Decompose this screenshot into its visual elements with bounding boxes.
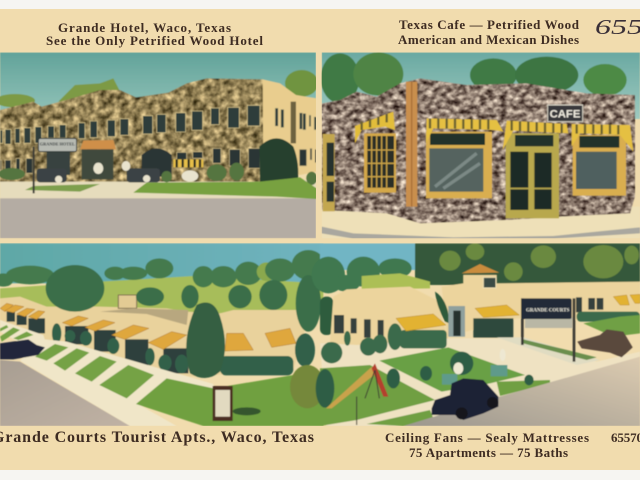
lawn [133,177,317,199]
garage door [142,148,172,177]
heading: Texas Cafe: Texas Cafe — Petrified Wood [399,17,580,32]
court buildings [0,297,305,377]
stone cafe building [322,78,635,223]
right window [573,135,626,196]
right half of courts [312,243,640,426]
caption: amenities [385,430,589,460]
small lawn [25,184,100,192]
centre lawn [379,347,525,392]
benches [442,365,507,385]
lobby front [47,152,70,175]
entrance canopy [80,140,116,149]
front lawn strip [367,410,433,426]
trees among buildings [46,265,321,332]
orange awnings [0,303,296,351]
tree line [0,250,325,287]
ivy [435,292,449,323]
sky [320,243,423,270]
main lawn [136,375,323,426]
field [0,276,323,313]
caption: amenities: 75 Apartments — 75 Baths [409,445,568,460]
hotel sign and post: GRANDE HOTEL [40,141,75,146]
road [403,357,640,426]
Grande Courts sign and posts: GRANDE COURTS [526,308,570,313]
left lawn [320,365,435,426]
windows [334,297,603,338]
entrance [82,149,113,179]
stone hotel building [0,78,269,182]
parked cars [37,168,160,182]
pavement grey strip [322,227,640,239]
panel: Grande Courts illustration [0,243,640,426]
striped awnings [355,112,633,152]
roadway and forecourt [320,338,640,426]
sky [322,52,640,119]
terrace lawns [0,325,154,398]
pavement [322,207,640,238]
cream wing [263,79,317,175]
side door [323,134,335,211]
upper right lawn [583,315,640,337]
left tree edge [320,297,333,335]
sky [0,52,316,110]
hedges [321,312,640,363]
CAFE sign: CAFE [550,109,581,121]
main window [426,132,492,198]
heading: Texas Cafe [398,17,580,47]
heading: Grande Hotel: See the Only Petrified Wood Hotel [46,33,263,48]
driveway median [497,337,600,365]
brick pillar [406,82,417,207]
office building [442,275,640,337]
trees behind hotel [0,70,318,107]
shrubs on lawn [316,352,534,408]
heading: Grande Hotel: Grande Hotel, Waco, Texas [58,20,231,35]
court sign [213,386,233,421]
wing arch [291,102,296,143]
heading: Grande Hotel [46,20,263,48]
light foliage [439,243,639,281]
caption: Grande Courts: Grande Courts Tourist Apts., Waco, Texas [0,429,314,446]
tower roof [462,264,499,273]
yellow awnings [396,294,640,331]
left trees [312,257,412,293]
back cottage [118,295,137,308]
office door [448,306,465,337]
dark tree band [415,243,640,285]
yellow striped awning [173,159,203,167]
pavement [0,180,316,198]
upper windows [0,105,317,144]
road [0,360,130,426]
handwritten number: 655 [595,15,640,39]
sky [0,243,323,283]
double door [506,133,559,218]
sign shadow [233,407,261,415]
tower window [483,277,496,288]
CAFE sign [548,105,583,122]
barred window [364,133,396,193]
lower windows [0,148,317,173]
porches [7,312,188,373]
large conifer [186,303,225,378]
right strip lawn [497,380,550,396]
panel: Texas Cafe illustration [321,52,640,239]
black car [0,339,45,359]
road [0,197,316,238]
round bush [290,365,325,408]
lawn lamp [453,349,506,374]
caption: amenities: Ceiling Fans — Sealy Mattresses [385,430,589,445]
field [362,273,430,289]
shrubs under awnings [52,323,315,375]
shrubs [0,163,317,185]
hotel sign and post [33,138,77,193]
white walk and curb [0,320,213,426]
brown parked car [577,329,633,357]
white figures [55,161,198,183]
trees behind cafe [321,52,627,103]
Grande Courts sign and posts [521,298,575,362]
playground slide and swing [326,363,388,425]
left half of courts [0,243,325,426]
dark evergreen bush [259,138,298,183]
court building left [330,287,448,345]
heading: Texas Cafe: American and Mexican Dishes [398,32,579,47]
roof slab [100,308,188,325]
panel: Grande Hotel illustration [0,52,318,238]
black car in front [432,378,498,420]
